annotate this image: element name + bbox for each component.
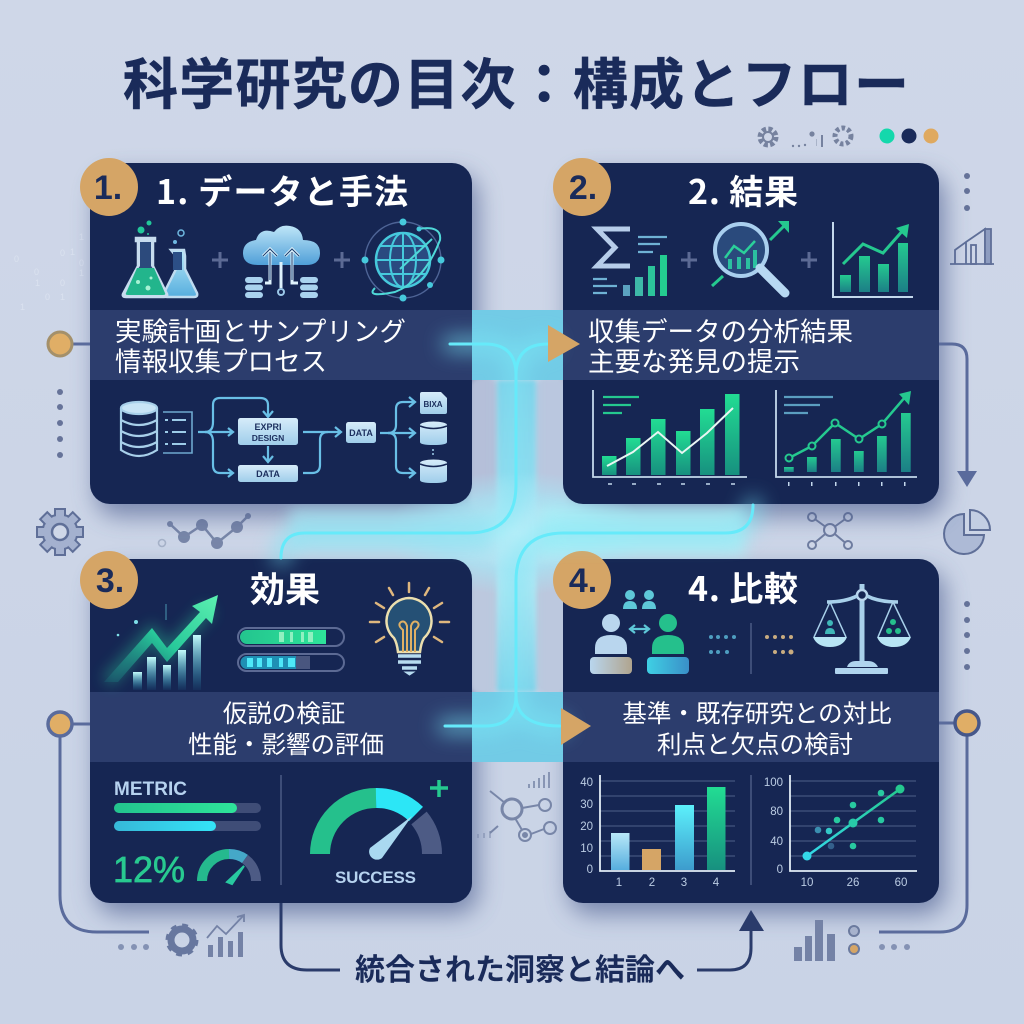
panel 1: data and methods xyxy=(90,163,472,504)
document: bixa: BIXA xyxy=(423,400,443,409)
top right decorative icons and colour dots xyxy=(760,128,938,147)
chart: scatter plot: 80 xyxy=(770,806,783,818)
band text 4: 利点と欠点の検討 xyxy=(657,726,853,761)
plus xyxy=(681,252,817,268)
connector: left top node xyxy=(48,332,90,356)
band text 1: 情報収集プロセス xyxy=(115,340,327,379)
badge 4: 4. xyxy=(569,562,597,600)
title: 科学研究の目次：構成とフロー xyxy=(123,40,909,120)
panel 3: effects xyxy=(90,559,472,903)
icon: cloud with data stores xyxy=(243,226,320,298)
glowing central connectors xyxy=(281,344,753,726)
badge 1 xyxy=(80,158,138,216)
bottom connector left xyxy=(281,903,340,970)
faint binary rain: 1 xyxy=(70,247,75,257)
chart: comparison bars xyxy=(580,775,735,889)
heading 3: 効果 xyxy=(250,562,320,613)
flow arrows xyxy=(198,397,415,478)
indicator dots xyxy=(709,623,794,674)
chart: scatter plot: 100 xyxy=(764,777,783,789)
database icon xyxy=(121,402,157,456)
metric label and bars xyxy=(114,779,261,831)
icon: left molecule chain xyxy=(158,513,251,549)
lower right icons xyxy=(794,920,910,961)
document: bixa xyxy=(420,392,447,414)
badge 2 xyxy=(553,158,611,216)
divider xyxy=(280,775,282,885)
icon: people comparing xyxy=(590,590,689,674)
list icon xyxy=(163,412,192,453)
box: data 2 xyxy=(346,422,376,443)
chart: bars with trend markers xyxy=(776,390,917,486)
right side lower dots xyxy=(964,601,970,670)
band text 1: 実験計画とサンプリング xyxy=(115,310,406,349)
faint binary rain xyxy=(14,232,84,312)
lower left icons xyxy=(118,915,244,957)
faint binary rain: 0 xyxy=(60,278,65,288)
faint binary rain: 1 xyxy=(79,232,84,242)
icon: right molecule xyxy=(808,513,852,549)
band text 2 xyxy=(588,310,853,379)
badge 3: 3. xyxy=(96,562,124,600)
faint binary rain: 0 xyxy=(79,258,84,268)
icon: light bulb xyxy=(370,583,449,675)
arrow: into panel 4 xyxy=(561,708,591,745)
badge 3 xyxy=(80,551,138,609)
badge 1: 1. xyxy=(94,169,122,207)
plus xyxy=(212,252,350,268)
band text 4 xyxy=(622,695,892,761)
band 3 xyxy=(90,692,472,762)
badge 2: 2. xyxy=(569,169,597,207)
connector: left lower loop xyxy=(48,712,149,932)
icon: pie chart xyxy=(944,510,990,554)
bottom conclusion text: 統合された洞察と結論へ xyxy=(355,945,685,989)
chart: comparison bars: 3 xyxy=(681,877,687,889)
icon: flasks xyxy=(123,220,197,297)
faint binary rain: 1 xyxy=(20,302,25,312)
band text 1 xyxy=(115,310,406,379)
band text 2: 主要な発見の提示 xyxy=(588,340,800,379)
faint binary rain: 1 xyxy=(79,268,84,278)
metric label and bars: METRIC xyxy=(114,779,187,800)
box: data xyxy=(238,465,298,482)
stat: 12%: 12% xyxy=(113,849,185,890)
faint binary rain: 0 xyxy=(34,267,39,277)
label: success: SUCCESS xyxy=(335,868,416,887)
chart: comparison bars: 0 xyxy=(587,864,593,876)
icon: success gauge xyxy=(320,780,448,860)
chart: scatter plot xyxy=(764,775,917,889)
faint binary rain: 0 xyxy=(60,248,65,258)
faint binary rain: 1 xyxy=(35,278,40,288)
band 2 xyxy=(563,310,939,380)
left side dots xyxy=(57,389,63,458)
chart: scatter plot: 60 xyxy=(895,877,907,889)
icon: magnifier with trend xyxy=(712,221,789,293)
icon: rising arrow with glow xyxy=(104,595,218,690)
panel 4: comparison xyxy=(563,559,939,903)
heading 1: 1. データと手法 xyxy=(156,165,408,214)
box: expri design: EXPRI xyxy=(254,422,282,432)
band 1 xyxy=(90,310,472,380)
icon: mini gauge xyxy=(202,854,256,884)
molecule between lower panels xyxy=(478,772,556,841)
faint binary rain: 1 xyxy=(60,292,65,302)
icon: bar chart with trend xyxy=(833,222,913,297)
chart: scatter plot: 10 xyxy=(801,877,813,889)
chart: comparison bars: 2 xyxy=(649,877,655,889)
panel 2: results xyxy=(563,163,939,504)
heading 2: 2. 結果 xyxy=(688,165,798,214)
band text 3: 仮説の検証 xyxy=(223,695,345,730)
band 4 xyxy=(563,692,939,762)
central light channels xyxy=(290,310,745,762)
icon: left gear xyxy=(37,509,83,555)
badge 4 xyxy=(553,551,611,609)
connector: right lower loop xyxy=(879,711,979,932)
chart: comparison bars: 4 xyxy=(713,877,720,889)
faint binary rain: 0 xyxy=(14,254,19,264)
box: expri design xyxy=(238,418,298,445)
heading 4: 4. 比較 xyxy=(688,562,798,611)
chart: comparison bars: 1 xyxy=(616,877,622,889)
icon: sigma statistics xyxy=(593,229,667,296)
divider xyxy=(750,775,752,885)
output data stores xyxy=(420,422,447,483)
chart: scatter plot: 40 xyxy=(770,836,783,848)
bottom connector right with arrow xyxy=(697,910,764,970)
chart: comparison bars: 40 xyxy=(580,777,593,789)
chart: comparison bars: 20 xyxy=(580,821,593,833)
icon: right line chart xyxy=(950,229,994,264)
icon: globe with orbit xyxy=(362,218,444,302)
chart: scatter plot: 0 xyxy=(777,864,783,876)
chart: comparison bars: 30 xyxy=(580,799,593,811)
right side dots xyxy=(964,173,970,211)
box: data: DATA xyxy=(256,469,280,479)
chart: comparison bars: 10 xyxy=(580,843,593,855)
chart: scatter plot: 26 xyxy=(847,877,859,889)
band text 3 xyxy=(188,695,384,761)
box: data 2: DATA xyxy=(349,428,373,438)
arrow: into panel 2 xyxy=(548,325,580,362)
progress bars xyxy=(238,628,344,671)
flow diagram xyxy=(121,392,447,483)
panel shadows xyxy=(96,174,945,914)
chart: bars with white line xyxy=(593,390,747,484)
box: expri design: DESIGN xyxy=(252,433,284,443)
connector: right top to pie xyxy=(939,344,977,487)
icon: balance scale xyxy=(813,584,911,674)
faint binary rain: 0 xyxy=(45,292,50,302)
band text 2: 収集データの分析結果 xyxy=(588,310,853,349)
band text 4: 基準・既存研究との対比 xyxy=(622,695,892,730)
band text 3: 性能・影響の評価 xyxy=(188,726,384,761)
